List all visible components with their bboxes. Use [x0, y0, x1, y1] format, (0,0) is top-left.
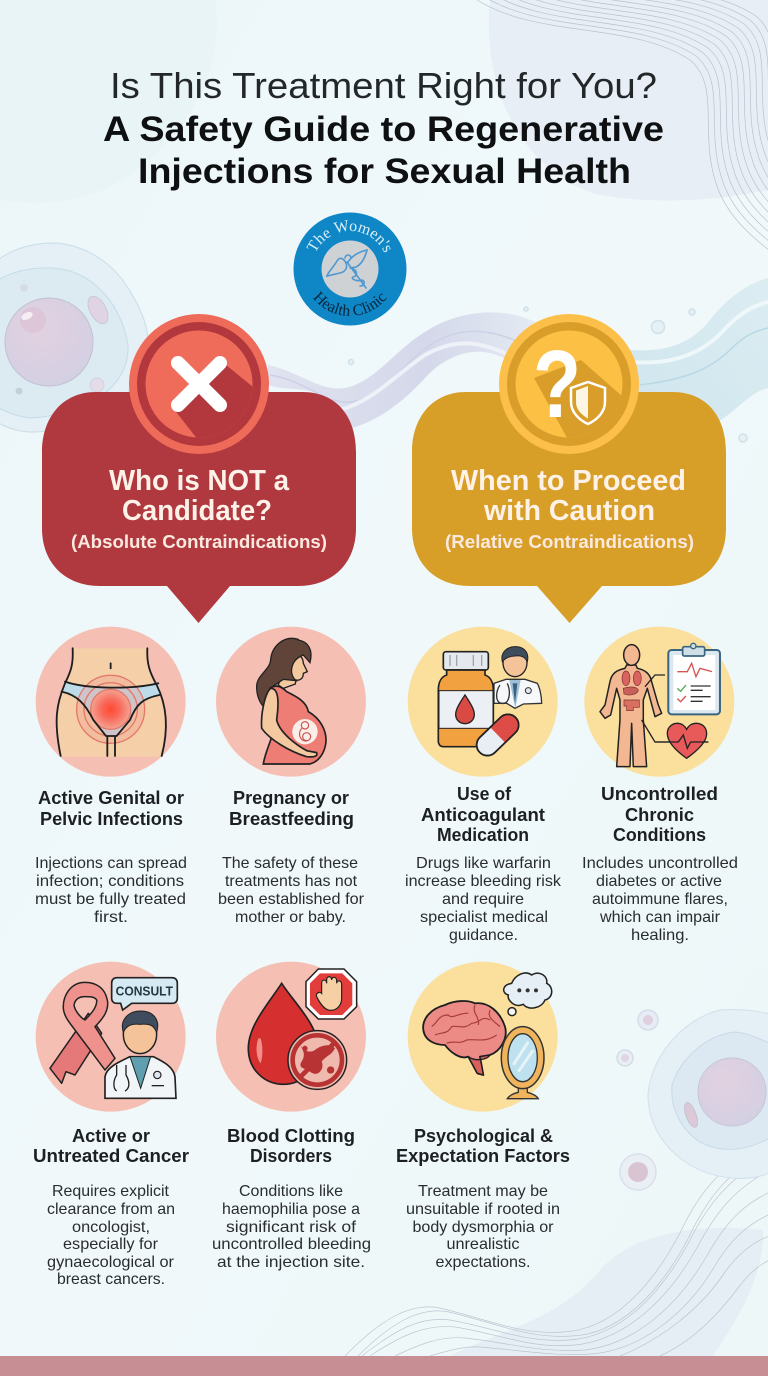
- thought bubble: [504, 973, 552, 1016]
- description: and require: [442, 891, 524, 908]
- card: anticoagulant medication: Medication: [437, 825, 529, 845]
- consult speech bubble: [112, 978, 177, 1010]
- description: Treatment may be: [418, 1183, 548, 1200]
- icon: question mark and shield: [499, 314, 639, 454]
- heading: Use of: [457, 784, 512, 804]
- description: significant risk of: [226, 1219, 357, 1236]
- footer bar: [0, 1356, 768, 1376]
- icon: cross in circle: [129, 314, 269, 454]
- description: infection; conditions: [36, 873, 184, 890]
- description: been established for: [218, 891, 365, 908]
- description: specialist medical: [420, 909, 548, 926]
- card: psychological and expectation factors: [396, 962, 570, 1271]
- panel: who is not a candidate header: [42, 314, 356, 623]
- description: gynaecological or: [47, 1254, 175, 1271]
- mirror: [501, 1027, 544, 1099]
- heading: Pregnancy or: [233, 788, 349, 808]
- icon: pregnant woman: [216, 627, 366, 777]
- card: active genital or pelvic infections: [35, 627, 187, 926]
- heading: Active Genital or: [38, 788, 184, 808]
- description: healing.: [631, 927, 689, 944]
- description: haemophilia pose a: [222, 1201, 360, 1218]
- description: expectations.: [436, 1254, 530, 1271]
- card: uncontrolled chronic conditions: [582, 627, 738, 944]
- description: [218, 855, 365, 926]
- description: at the injection site.: [217, 1254, 365, 1271]
- background: small bubbles: [348, 307, 747, 442]
- heading: When to Proceed: [451, 465, 686, 497]
- icon: question mark and shield: ?: [533, 331, 581, 438]
- description: [35, 855, 187, 926]
- card: active genital or pelvic infections: Pelvic Infections: [40, 809, 183, 829]
- icon: brain, thought bubble and mirror: [408, 962, 558, 1112]
- description: unrealistic: [446, 1236, 520, 1253]
- description: body dysmorphia or: [412, 1219, 554, 1236]
- description: diabetes or active: [596, 873, 722, 890]
- description: Injections can spread: [35, 855, 187, 872]
- description: [582, 855, 738, 944]
- illustration: stem cell right: [617, 1009, 768, 1190]
- icon: blood drop, stop hand, clot: [216, 962, 366, 1112]
- heading: Active or: [72, 1126, 150, 1146]
- card: blood clotting disorders: [212, 962, 371, 1271]
- logo: The Women's Health Clinic: [294, 212, 406, 326]
- icon: medicine bottle, doctor and capsule: [408, 627, 558, 777]
- panel: who is not a candidate header: Candidate?: [122, 495, 272, 527]
- description: clearance from an: [47, 1201, 175, 1218]
- card: active or untreated cancer: [33, 962, 189, 1288]
- title line 3: Injections for Sexual Health: [138, 152, 631, 191]
- panel: proceed with caution header: with Caution: [483, 495, 655, 527]
- description: autoimmune flares,: [592, 891, 728, 908]
- illustration: stem cell left: [0, 243, 148, 432]
- icon: pelvic infection: [36, 627, 186, 777]
- description: [47, 1183, 175, 1288]
- card: blood clotting disorders: Disorders: [250, 1146, 332, 1166]
- card: anticoagulant medication: [405, 627, 562, 944]
- background: blue ribbon wave: [630, 278, 768, 424]
- description: must be fully treated: [35, 891, 186, 908]
- description: [212, 1183, 371, 1271]
- card: psychological and expectation factors: Expectation Factors: [396, 1146, 570, 1166]
- icon: awareness ribbon and consulting doctor: [36, 962, 186, 1112]
- logo: The Women's Health Clinic: Health Clinic: [312, 290, 387, 316]
- description: Conditions like: [239, 1183, 343, 1200]
- description: Drugs like warfarin: [416, 855, 551, 872]
- heading: Uncontrolled: [601, 784, 718, 804]
- heading: Psychological &: [414, 1126, 553, 1146]
- description: mother or baby.: [235, 909, 346, 926]
- consult speech bubble: CONSULT: [116, 985, 173, 999]
- logo: The Women's Health Clinic: The Women's: [306, 220, 391, 252]
- card: uncontrolled chronic conditions: Conditions: [613, 825, 706, 845]
- description: unsuitable if rooted in: [406, 1201, 560, 1218]
- heading: Who is NOT a: [109, 465, 290, 497]
- description: [405, 855, 562, 944]
- description: Includes uncontrolled: [582, 855, 738, 872]
- description: treatments has not: [225, 873, 358, 890]
- description: [406, 1183, 560, 1271]
- icon: body, clipboard and heart: [584, 627, 734, 777]
- card: pregnancy or breastfeeding: Breastfeeding: [229, 809, 354, 829]
- title line 2: A Safety Guide to Regenerative: [103, 110, 664, 149]
- description: first.: [94, 909, 128, 926]
- subheading: (Absolute Contraindications): [71, 532, 327, 552]
- background: lilac ribbon wave: [268, 312, 535, 428]
- description: oncologist,: [72, 1219, 150, 1236]
- card: active or untreated cancer: Untreated Cancer: [33, 1146, 189, 1166]
- speech bubble: [412, 392, 726, 623]
- description: especially for: [63, 1236, 159, 1253]
- speech bubble: [42, 392, 356, 623]
- heading: Blood Clotting: [227, 1126, 355, 1146]
- subheading: (Relative Contraindications): [445, 532, 694, 552]
- card: pregnancy or breastfeeding: [216, 627, 366, 926]
- title line 1: Is This Treatment Right for You?: [110, 65, 657, 106]
- title: [103, 65, 664, 191]
- description: The safety of these: [222, 855, 358, 872]
- description: which can impair: [599, 909, 721, 926]
- card: anticoagulant medication: Anticoagulant: [421, 805, 545, 825]
- description: uncontrolled bleeding: [212, 1236, 371, 1253]
- description: increase bleeding risk: [405, 873, 562, 890]
- card: uncontrolled chronic conditions: Chronic: [625, 805, 694, 825]
- description: guidance.: [449, 927, 518, 944]
- description: breast cancers.: [57, 1271, 165, 1288]
- description: Requires explicit: [52, 1183, 170, 1200]
- panel: proceed with caution header: [412, 314, 726, 623]
